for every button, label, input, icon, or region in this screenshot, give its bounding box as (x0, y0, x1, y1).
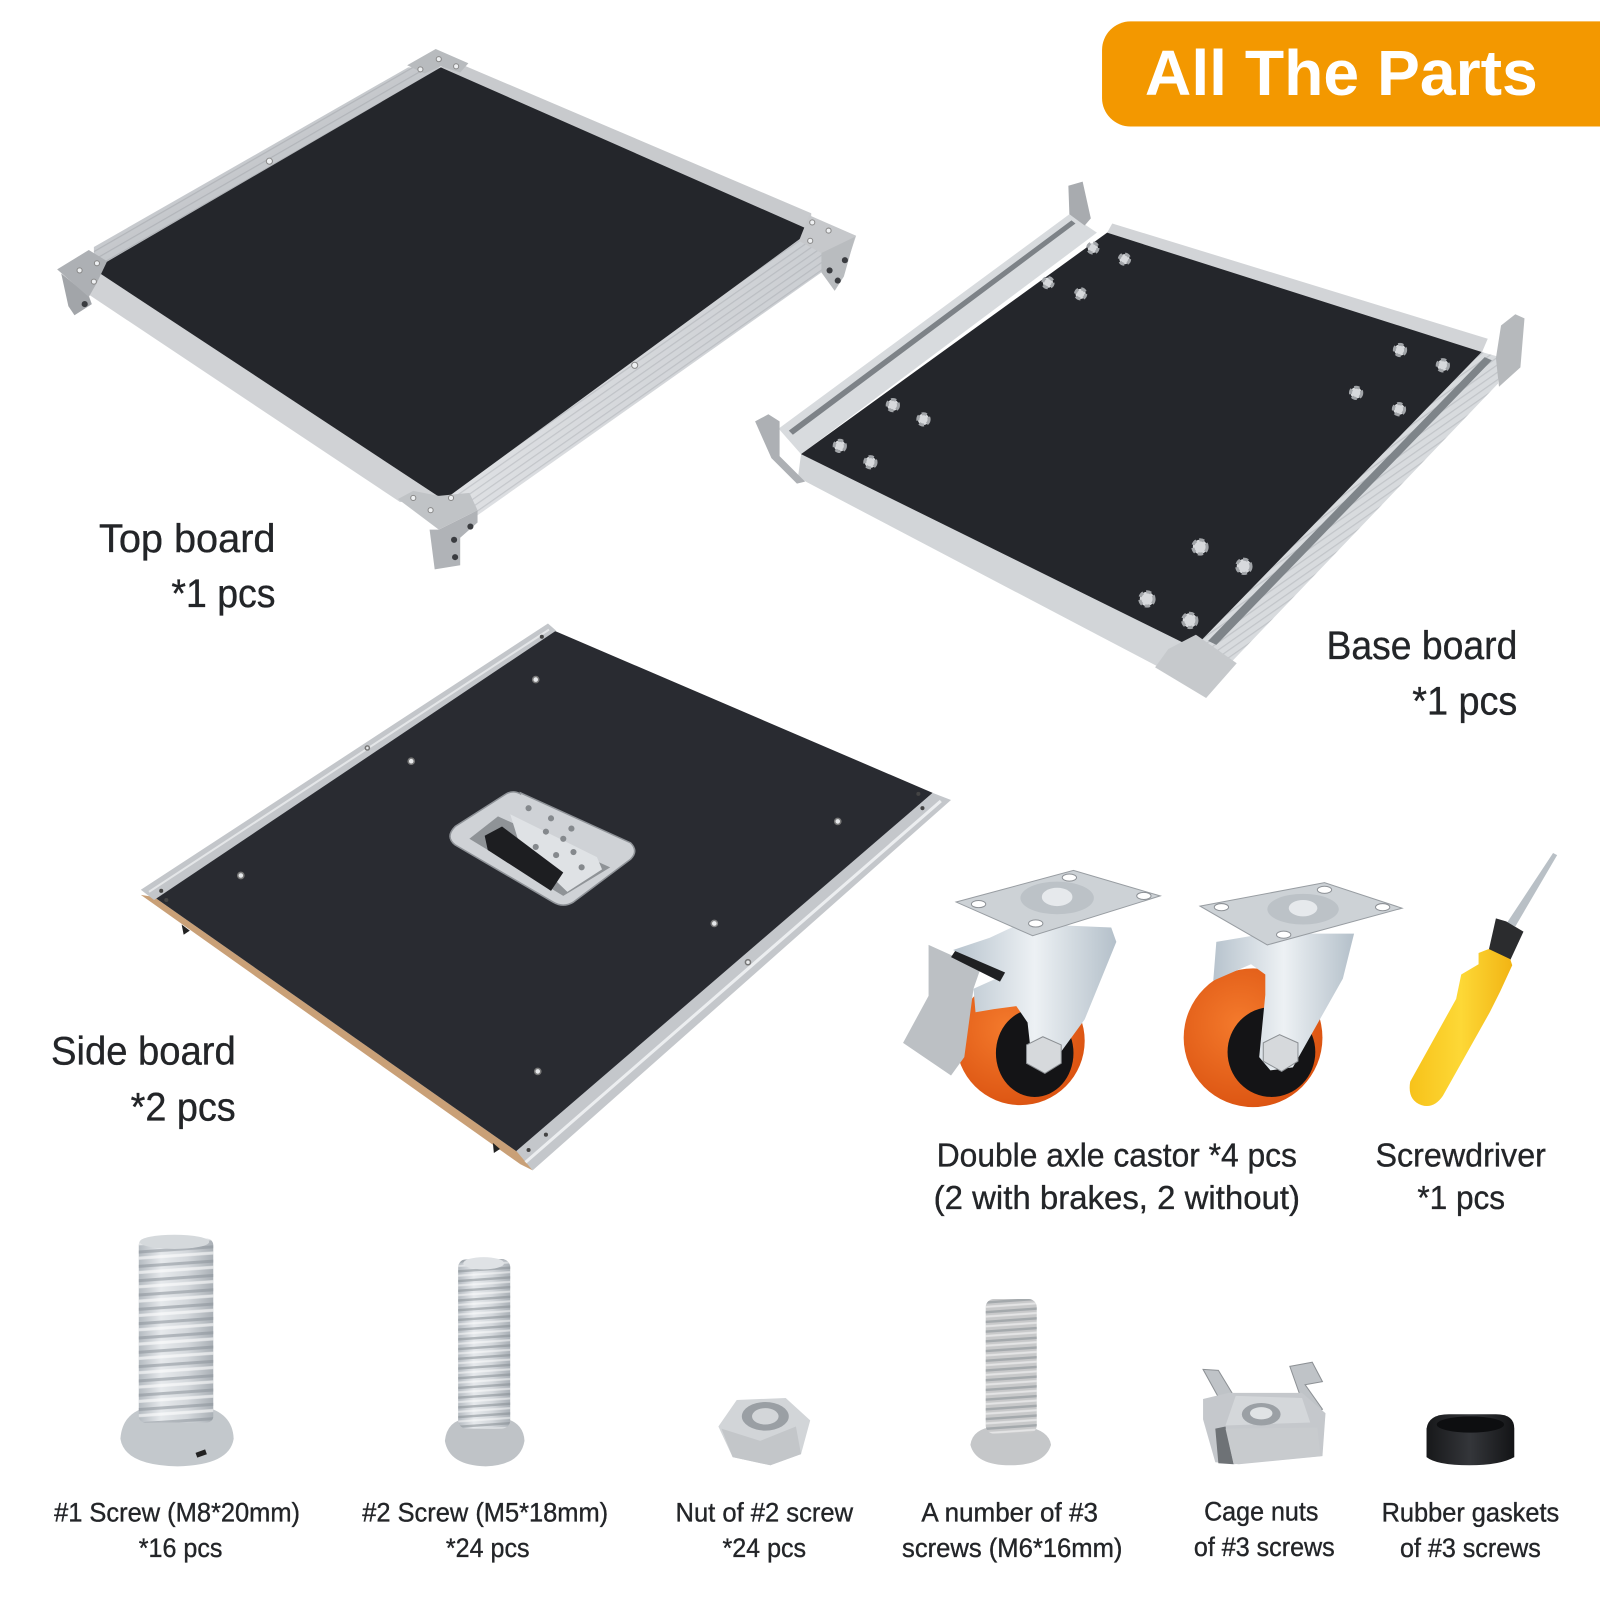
label: #1 screw: #1 Screw (M8*20mm) (54, 1497, 300, 1527)
front-left rail (88, 269, 444, 502)
screw #1 (120, 1235, 234, 1466)
black panel (801, 233, 1482, 648)
label: base board: *1 pcs (1412, 679, 1517, 723)
label: base board: Base board (1327, 624, 1517, 668)
rivets (77, 57, 831, 513)
label: top board: Top board (99, 517, 276, 561)
label: rubber gaskets: Rubber gaskets (1382, 1497, 1559, 1527)
label: cage nuts: Cage nuts (1204, 1496, 1318, 1526)
label: side board (51, 1029, 236, 1129)
label: rubber gaskets: of #3 screws (1400, 1533, 1541, 1563)
label: cage nuts: of #3 screws (1194, 1532, 1335, 1562)
front-right rail (444, 231, 829, 515)
nut of #2 screw (718, 1398, 810, 1465)
mounting plate (1200, 883, 1402, 945)
panel: side board (141, 623, 951, 1170)
right rail (1194, 352, 1500, 673)
panel: top board (57, 49, 856, 569)
label: #3 screws: A number of #3 (921, 1497, 1098, 1527)
yellow handle (1410, 949, 1512, 1106)
corner brackets (407, 49, 468, 73)
axle bolt (1263, 1035, 1298, 1071)
castor with brake (903, 870, 1160, 1105)
black panel (94, 67, 811, 500)
front-left rail (798, 454, 1196, 669)
corner holes (159, 635, 924, 1152)
screw #3 (970, 1299, 1051, 1465)
axle bolt (1027, 1037, 1061, 1073)
label: #1 screw: *16 pcs (139, 1533, 222, 1563)
wheel (1184, 968, 1322, 1107)
label: top board (99, 517, 276, 616)
brake lever (903, 945, 981, 1076)
wheel (956, 977, 1085, 1105)
label: screwdriver (1376, 1137, 1546, 1217)
label: cage nuts (1194, 1496, 1335, 1562)
back-left rail (94, 67, 445, 271)
label: #1 screw (54, 1497, 300, 1563)
title badge: All The Parts (1102, 21, 1600, 127)
icon: screwdriver (1410, 853, 1557, 1106)
black collar (1489, 918, 1523, 960)
label: castor: Double axle castor *4 pcs (937, 1137, 1297, 1174)
corner legs (755, 414, 805, 484)
label: #3 screws: screws (M6*16mm) (902, 1533, 1122, 1563)
label: nut: *24 pcs (722, 1533, 806, 1563)
right rail (516, 793, 951, 1170)
label: top board: *1 pcs (171, 572, 276, 616)
label: rubber gaskets (1382, 1497, 1559, 1563)
label: #3 screws (902, 1497, 1122, 1563)
label: #2 screw: *24 pcs (446, 1533, 530, 1563)
panel: base board (755, 182, 1524, 698)
black panel (154, 631, 933, 1154)
label: side board: Side board (51, 1029, 236, 1073)
left rail (779, 214, 1097, 454)
handle (450, 792, 635, 905)
screw #2 (445, 1257, 524, 1466)
back-right rail (441, 61, 811, 233)
label: side board: *2 pcs (131, 1085, 236, 1129)
castor without brake (1184, 883, 1402, 1107)
rubber gasket (1427, 1414, 1514, 1465)
label: nut: Nut of #2 screw (676, 1497, 854, 1527)
wood edge (141, 895, 533, 1170)
shaft (1507, 853, 1557, 927)
t-nuts (834, 243, 1448, 628)
support tabs (182, 924, 190, 935)
label: #2 screw (362, 1497, 608, 1563)
fork (953, 923, 1116, 1066)
back rail (1107, 223, 1488, 353)
label: base board (1327, 624, 1517, 723)
label: nut (676, 1497, 854, 1563)
screw holes (238, 677, 841, 1074)
label: #2 screw: #2 Screw (M5*18mm) (362, 1497, 608, 1527)
label: castor (934, 1137, 1300, 1217)
title text: All The Parts (1145, 37, 1538, 109)
label: screwdriver: Screwdriver (1376, 1137, 1546, 1174)
label: screwdriver: *1 pcs (1417, 1180, 1505, 1217)
mounting plate (956, 870, 1160, 936)
cage nut (1203, 1362, 1326, 1464)
fork (1213, 934, 1354, 1070)
label: castor: (2 with brakes, 2 without) (934, 1180, 1300, 1217)
left rail (141, 623, 556, 900)
